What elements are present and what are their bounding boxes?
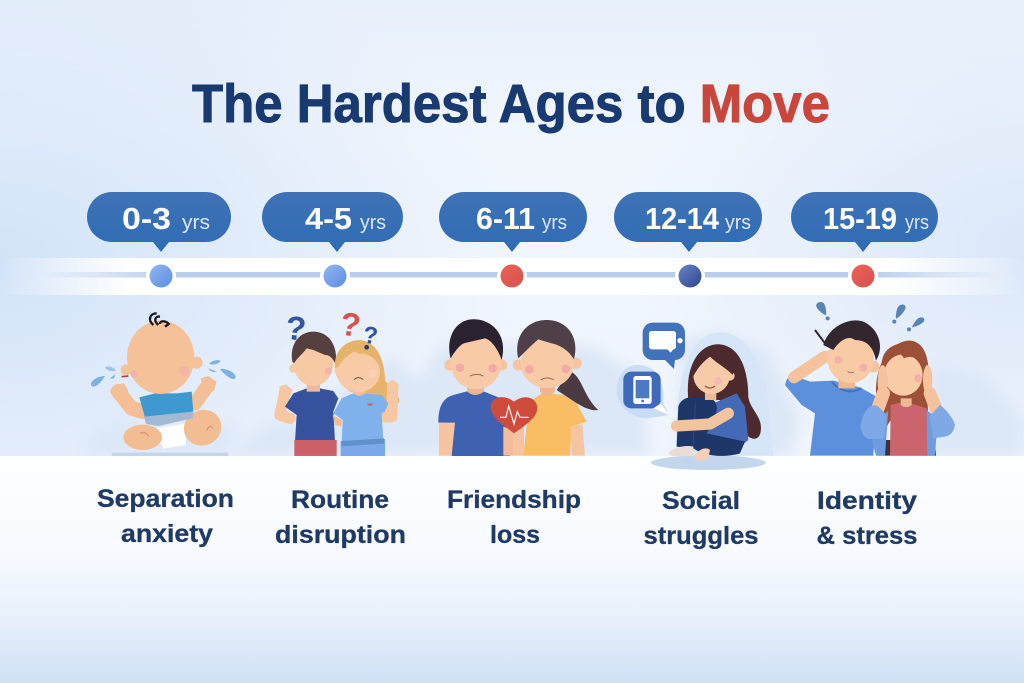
illustration: stressed teens [785, 302, 955, 456]
illustration: friends with broken heart [438, 319, 598, 456]
icon: question marks: ? [284, 310, 308, 349]
age marker: 15-19 yrs: 15-19 [823, 201, 897, 236]
icon: question marks: ? [338, 305, 363, 344]
label: social struggles [644, 487, 758, 550]
label: identity and stress: & stress [816, 522, 918, 550]
label: separation anxiety [97, 485, 234, 548]
label: routine disruption: Routine [291, 486, 389, 514]
label: friendship loss: Friendship [447, 486, 581, 514]
icon: video chat bubble [643, 323, 685, 369]
label: social struggles: Social [662, 487, 740, 515]
age marker: 6-11 yrs [439, 192, 587, 291]
label: routine disruption: disruption [275, 521, 406, 549]
age marker: 15-19 yrs [791, 192, 938, 291]
age marker: 0-3 yrs [87, 192, 231, 291]
age marker: 4-5 yrs: 4-5 [305, 201, 352, 236]
label: separation anxiety: Separation [97, 485, 234, 513]
age marker: 15-19 yrs: yrs [905, 212, 929, 234]
icon: phone bubble [617, 365, 669, 418]
icon: exclamation marks [816, 302, 924, 331]
age marker: 4-5 yrs [262, 192, 403, 291]
title: The Hardest Ages to Move [192, 74, 830, 134]
age marker: 0-3 yrs: yrs [182, 212, 210, 234]
age marker: 4-5 yrs: yrs [360, 212, 386, 234]
label: social struggles: struggles [644, 522, 758, 550]
age marker: 12-14 yrs: 12-14 [645, 201, 720, 236]
illustration: girl with phone and chat bubbles [617, 323, 773, 470]
icon: heart with pulse [491, 397, 537, 433]
icon: question marks: ? [362, 322, 379, 350]
illustration: crying baby [91, 313, 236, 456]
age marker: 6-11 yrs: 6-11 [476, 201, 535, 236]
label: friendship loss [447, 486, 581, 549]
label: separation anxiety: anxiety [121, 520, 213, 548]
background hills [82, 332, 1024, 456]
age marker: 0-3 yrs: 0-3 [122, 201, 171, 236]
icon: question marks [284, 305, 379, 350]
label: routine disruption [275, 486, 406, 549]
label: identity and stress: Identity [817, 487, 917, 515]
illustration: confused siblings [279, 305, 399, 456]
age marker: 6-11 yrs: yrs [542, 212, 567, 234]
timeline track [0, 258, 1024, 295]
age marker: 12-14 yrs [614, 192, 762, 291]
age marker: 12-14 yrs: yrs [725, 212, 751, 234]
label: identity and stress [816, 487, 918, 550]
label: friendship loss: loss [490, 521, 540, 549]
